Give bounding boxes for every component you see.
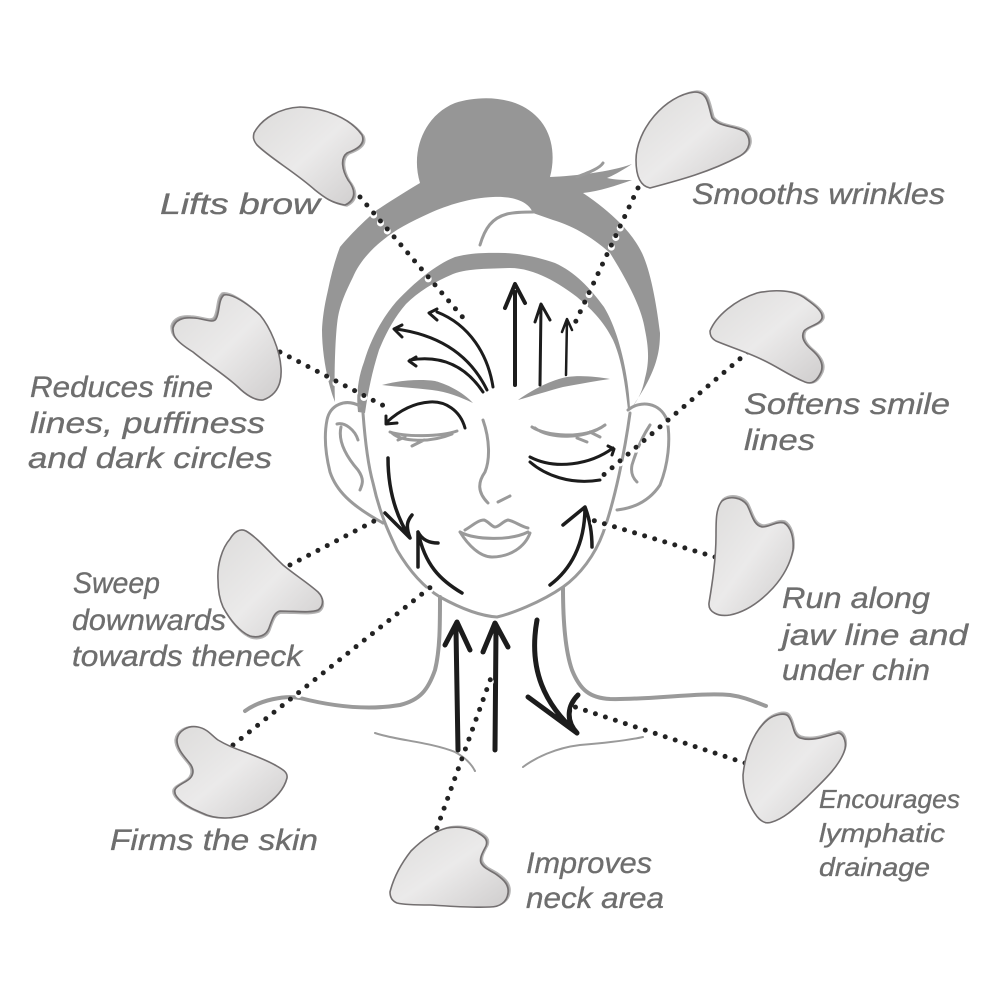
under-eye arrows	[530, 446, 614, 481]
neck arrows	[445, 620, 578, 750]
label: sweep downwards: Sweep	[73, 567, 160, 600]
label: sweep downwards: towards theneck	[72, 640, 304, 673]
label: reduces fine lines: lines, puffiness	[30, 407, 265, 440]
dotted leader lines	[233, 188, 748, 830]
label: run along jaw line	[777, 582, 970, 687]
stone: reduces fine lines	[171, 293, 281, 400]
label: encourages lymphatic drainage: Encourages	[819, 784, 960, 814]
label: softens smile lines	[744, 388, 950, 457]
hair strand	[480, 163, 603, 245]
label: run along jaw line: under chin	[782, 654, 930, 687]
face outline	[363, 413, 630, 617]
cheek and jaw arrows	[385, 458, 592, 593]
stone: smooths wrinkles	[636, 91, 751, 188]
label: run along jaw line: Run along	[782, 582, 930, 615]
label: softens smile lines: Softens smile	[744, 388, 950, 421]
stone: firms the skin	[173, 727, 287, 818]
eyes	[390, 425, 605, 446]
collarbones	[375, 733, 643, 771]
label: sweep downwards: downwards	[72, 604, 226, 637]
label: improves neck area: Improves	[526, 847, 652, 880]
massage arrows	[385, 284, 614, 750]
label: sweep downwards	[72, 567, 304, 673]
label: improves neck area	[526, 847, 664, 915]
label: encourages lymphatic drainage: lymphatic	[819, 818, 945, 848]
stone: sweep downwards	[218, 530, 324, 639]
stone: run along jaw line	[709, 496, 794, 615]
label: softens smile lines: lines	[744, 424, 815, 457]
stone: softens smile lines	[710, 291, 824, 383]
lips	[460, 520, 530, 557]
label: smooths wrinkles: Smooths wrinkles	[692, 178, 945, 211]
illustration: woman's face	[245, 98, 766, 771]
neck and shoulders	[245, 588, 766, 711]
label: reduces fine lines	[28, 371, 272, 475]
stone: encourages lymphatic drainage	[743, 712, 846, 823]
label: encourages lymphatic drainage	[819, 784, 960, 882]
eyebrows	[382, 376, 610, 403]
label: encourages lymphatic drainage: drainage	[819, 852, 930, 882]
forehead sideways arrows	[386, 309, 493, 428]
hair bun and hairline	[322, 98, 660, 410]
stone: improves neck area	[390, 826, 510, 907]
stone: lifts brow	[253, 107, 365, 206]
label: lifts brow: Lifts brow	[160, 188, 323, 221]
label: improves neck area: neck area	[526, 882, 664, 915]
ears	[325, 403, 669, 523]
label: reduces fine lines: Reduces fine	[30, 371, 213, 404]
label: reduces fine lines: and dark circles	[28, 442, 272, 475]
label: firms the skin: Firms the skin	[110, 824, 318, 857]
nose	[480, 420, 510, 503]
headband	[357, 253, 630, 413]
forehead upward arrows	[505, 284, 572, 385]
label: run along jaw line: jaw line and	[777, 619, 970, 652]
